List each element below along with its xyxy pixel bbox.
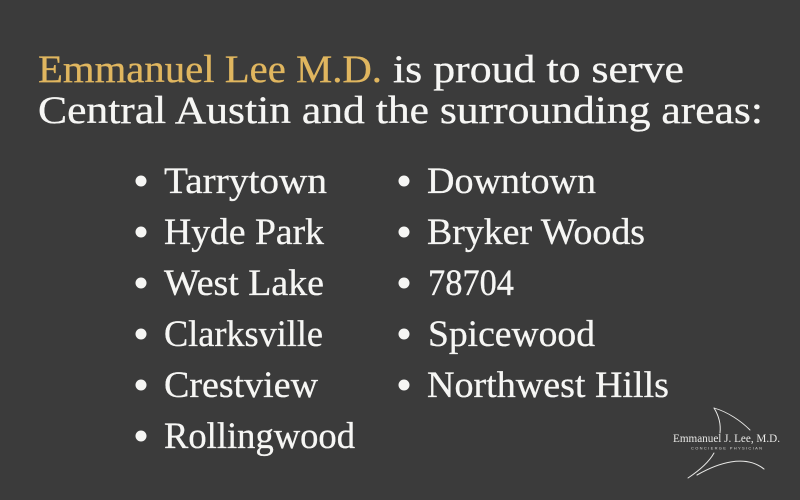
heading: Central Austin and the surrounding areas: <box>38 89 763 132</box>
logo <box>673 408 780 478</box>
logo tagline: CONCIERGE PHYSICIAN <box>691 446 762 450</box>
right column list: Northwest Hills <box>427 365 669 406</box>
left column list: Tarrytown <box>164 161 327 202</box>
heading <box>38 48 763 132</box>
logo name: Emmanuel J. Lee, M.D. <box>673 433 780 445</box>
left column list: Clarksville <box>164 314 323 355</box>
left column list <box>136 161 355 457</box>
left column list: Crestview <box>164 365 318 406</box>
heading: is proud to serve <box>393 48 684 91</box>
right column list: 78704 <box>428 263 514 304</box>
heading: Emmanuel Lee M.D. <box>38 48 382 91</box>
left column list: Hyde Park <box>164 212 325 253</box>
right column list: Spicewood <box>428 314 595 355</box>
left column list: Rollingwood <box>164 416 355 457</box>
icon: fin swoosh <box>688 408 764 478</box>
right column list <box>398 161 669 406</box>
left column list: West Lake <box>164 263 324 304</box>
right column list: Bryker Woods <box>427 212 645 253</box>
right column list: Downtown <box>427 161 596 202</box>
